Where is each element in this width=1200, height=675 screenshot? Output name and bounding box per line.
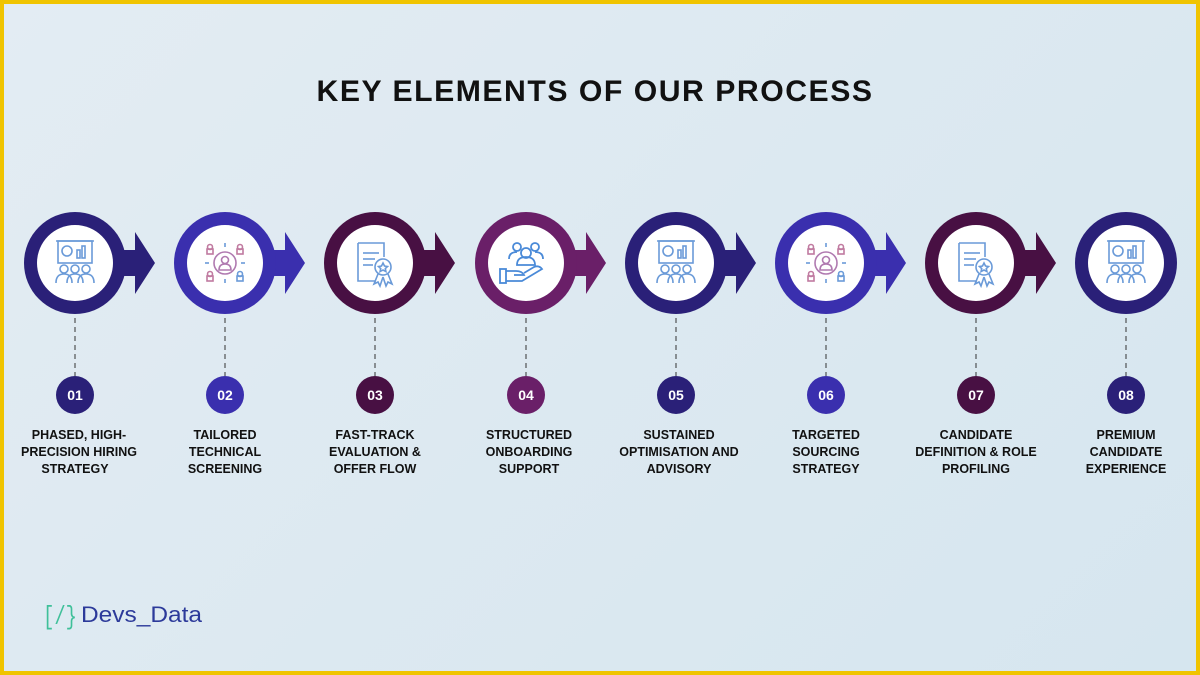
step 01: PHASED, HIGH- [32, 428, 126, 442]
step 01: STRATEGY [41, 462, 109, 476]
step 07: CANDIDATE [940, 428, 1012, 442]
step 06: STRATEGY [792, 462, 860, 476]
step 05: SUSTAINED [643, 428, 715, 442]
step 08: CANDIDATE [1090, 445, 1162, 459]
step 05: ADVISORY [647, 462, 712, 476]
step 04: 04 [518, 387, 534, 403]
step 05 [619, 212, 756, 476]
step 08: 08 [1118, 387, 1134, 403]
step 02: TECHNICAL [189, 445, 261, 459]
step 07 [915, 212, 1056, 476]
step 02: TAILORED [194, 428, 256, 442]
step 04 [475, 212, 606, 476]
step 08: PREMIUM [1096, 428, 1156, 442]
step 05: 05 [668, 387, 684, 403]
step 07: PROFILING [942, 462, 1010, 476]
step 06 [775, 212, 906, 476]
title: KEY ELEMENTS OF OUR PROCESS [316, 75, 874, 108]
logo: [/} [43, 602, 77, 632]
step 03 [324, 212, 455, 476]
logo [43, 602, 203, 632]
step 01: 01 [67, 387, 83, 403]
step 07: DEFINITION & ROLE [915, 445, 1037, 459]
step 02 [174, 212, 305, 476]
logo: Devs_Data [81, 602, 203, 627]
step 06: 06 [818, 387, 834, 403]
step 03: EVALUATION & [329, 445, 421, 459]
step 04: STRUCTURED [486, 428, 572, 442]
step 08 [1075, 212, 1177, 476]
step 06: TARGETED [792, 428, 860, 442]
step 04: SUPPORT [499, 462, 560, 476]
step 06: SOURCING [792, 445, 860, 459]
step 02: 02 [217, 387, 233, 403]
step 03: OFFER FLOW [334, 462, 417, 476]
step 01 [21, 212, 155, 476]
step 03: 03 [367, 387, 383, 403]
step 07: 07 [968, 387, 984, 403]
step 05: OPTIMISATION AND [619, 445, 739, 459]
step 03: FAST-TRACK [335, 428, 415, 442]
step 02: SCREENING [188, 462, 262, 476]
step 04: ONBOARDING [486, 445, 572, 459]
step 08: EXPERIENCE [1086, 462, 1166, 476]
step 01: PRECISION HIRING [21, 445, 137, 459]
